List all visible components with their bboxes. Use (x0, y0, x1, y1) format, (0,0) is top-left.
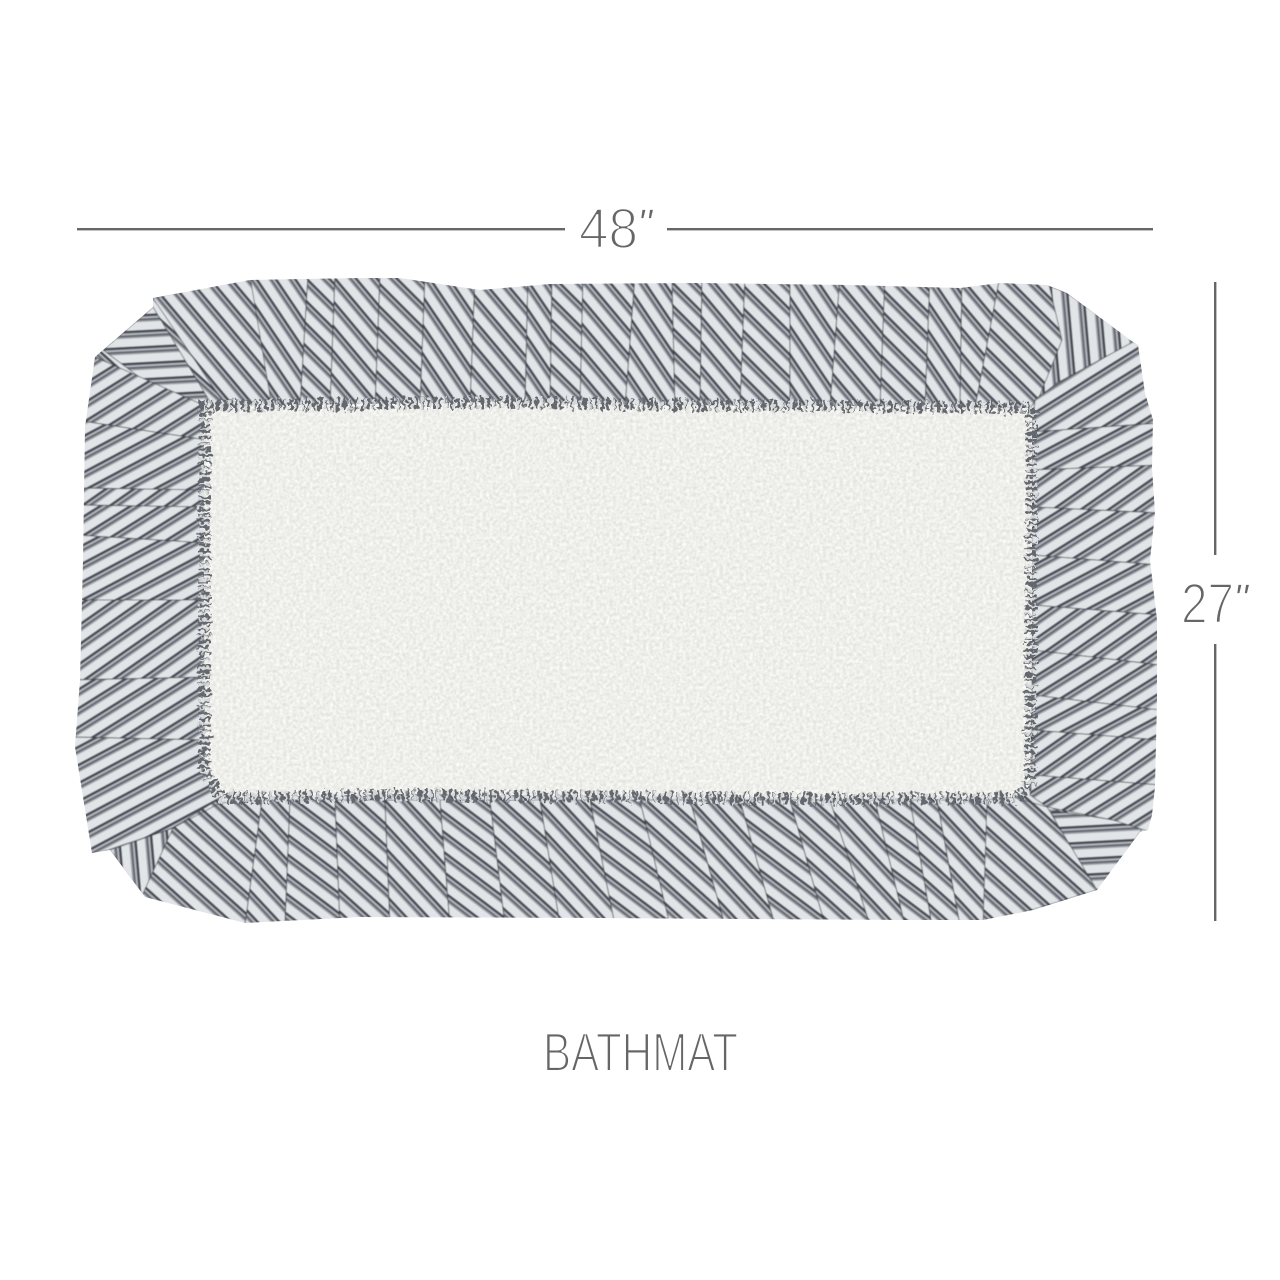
plush white centre (204, 402, 1032, 798)
frayed seam around the plush centre (204, 402, 1032, 799)
height dimension line: 27 inches: 27 (1181, 572, 1234, 636)
bathmat product illustration (70, 270, 1165, 930)
width dimension line: 48 inches: " (637, 200, 654, 247)
width dimension line: 48 inches: 48 (579, 197, 638, 261)
product label: BATHMAT (543, 1021, 738, 1083)
striped ruffle border (70, 270, 1165, 930)
height dimension line: 27 inches (1181, 282, 1250, 921)
width dimension line: 48 inches (77, 197, 1153, 261)
height dimension line: 27 inches: " (1233, 575, 1250, 622)
